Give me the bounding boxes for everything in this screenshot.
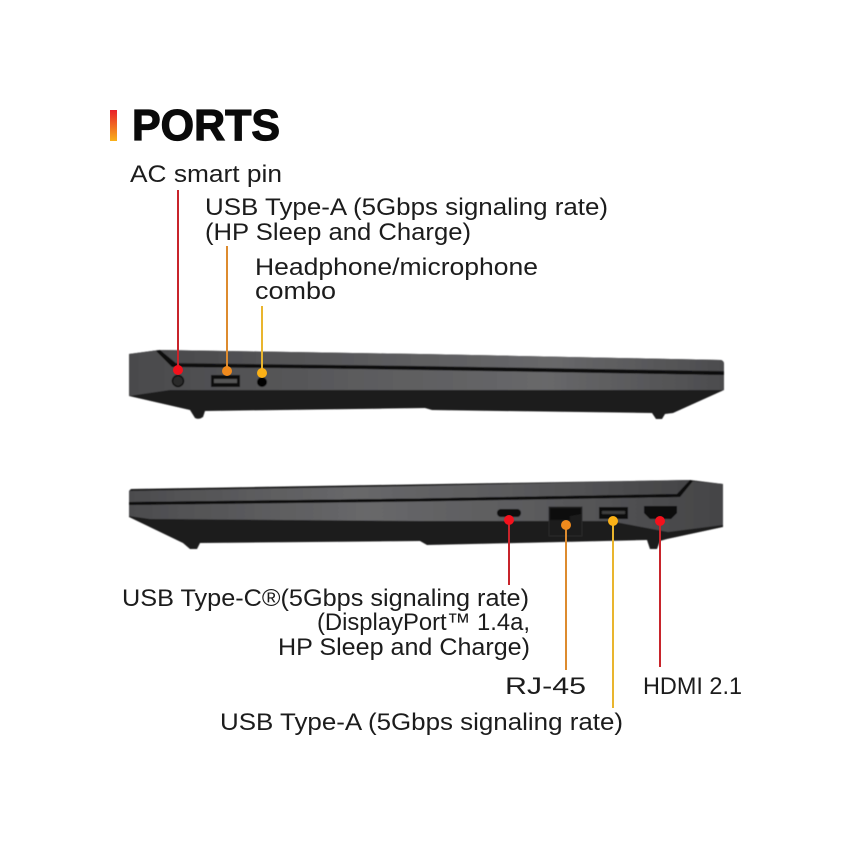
lower lid band and port band <box>129 481 723 532</box>
callout: USB Type-C <box>122 515 530 661</box>
USB-C port <box>497 509 521 517</box>
callout: headphone/microphone combo <box>255 254 538 378</box>
callout: USB Type-C: HP Sleep and Charge) <box>278 634 530 661</box>
laptop right side view <box>129 480 723 549</box>
callout: RJ-45 <box>505 520 586 700</box>
callout: USB Type-A sleep and charge: (HP Sleep and Charge) <box>205 219 471 246</box>
lid seam <box>129 480 693 505</box>
callout: USB Type-C: USB Type-C®(5Gbps signaling rate) <box>122 585 529 612</box>
callout: AC smart pin: AC smart pin <box>130 161 282 188</box>
upper lid band <box>129 480 690 502</box>
HDMI port <box>644 506 677 519</box>
callout: RJ-45: RJ-45 <box>505 673 586 700</box>
callout: AC smart pin <box>130 161 282 375</box>
title accent bar <box>110 110 117 141</box>
chassis base <box>129 350 724 419</box>
USB-A port <box>599 507 628 519</box>
callout: USB Type-A sleep and charge <box>205 194 608 376</box>
callout: USB Type-A: USB Type-A (5Gbps signaling rate) <box>220 709 623 736</box>
callout: headphone/microphone combo: Headphone/microphone <box>255 254 538 281</box>
upper lid band <box>160 350 724 371</box>
callout: USB Type-A <box>220 516 623 736</box>
laptop left side view <box>129 350 724 419</box>
title <box>110 101 280 150</box>
callout: HDMI 2.1: HDMI 2.1 <box>643 673 742 700</box>
callout: headphone/microphone combo: combo <box>255 278 336 305</box>
callout: HDMI 2.1 <box>643 516 742 700</box>
callout: USB Type-C: (DisplayPort™ 1.4a, <box>317 609 530 636</box>
side wall and port band <box>129 350 724 396</box>
chassis base <box>129 480 723 549</box>
lid seam <box>156 350 724 375</box>
callout: USB Type-A sleep and charge: USB Type-A (5Gbps signaling rate) <box>205 194 608 221</box>
USB-A port <box>211 375 240 387</box>
RJ-45 port <box>549 507 582 536</box>
AC port <box>172 376 184 386</box>
headphone jack <box>257 377 267 387</box>
title text: PORTS <box>132 101 280 150</box>
